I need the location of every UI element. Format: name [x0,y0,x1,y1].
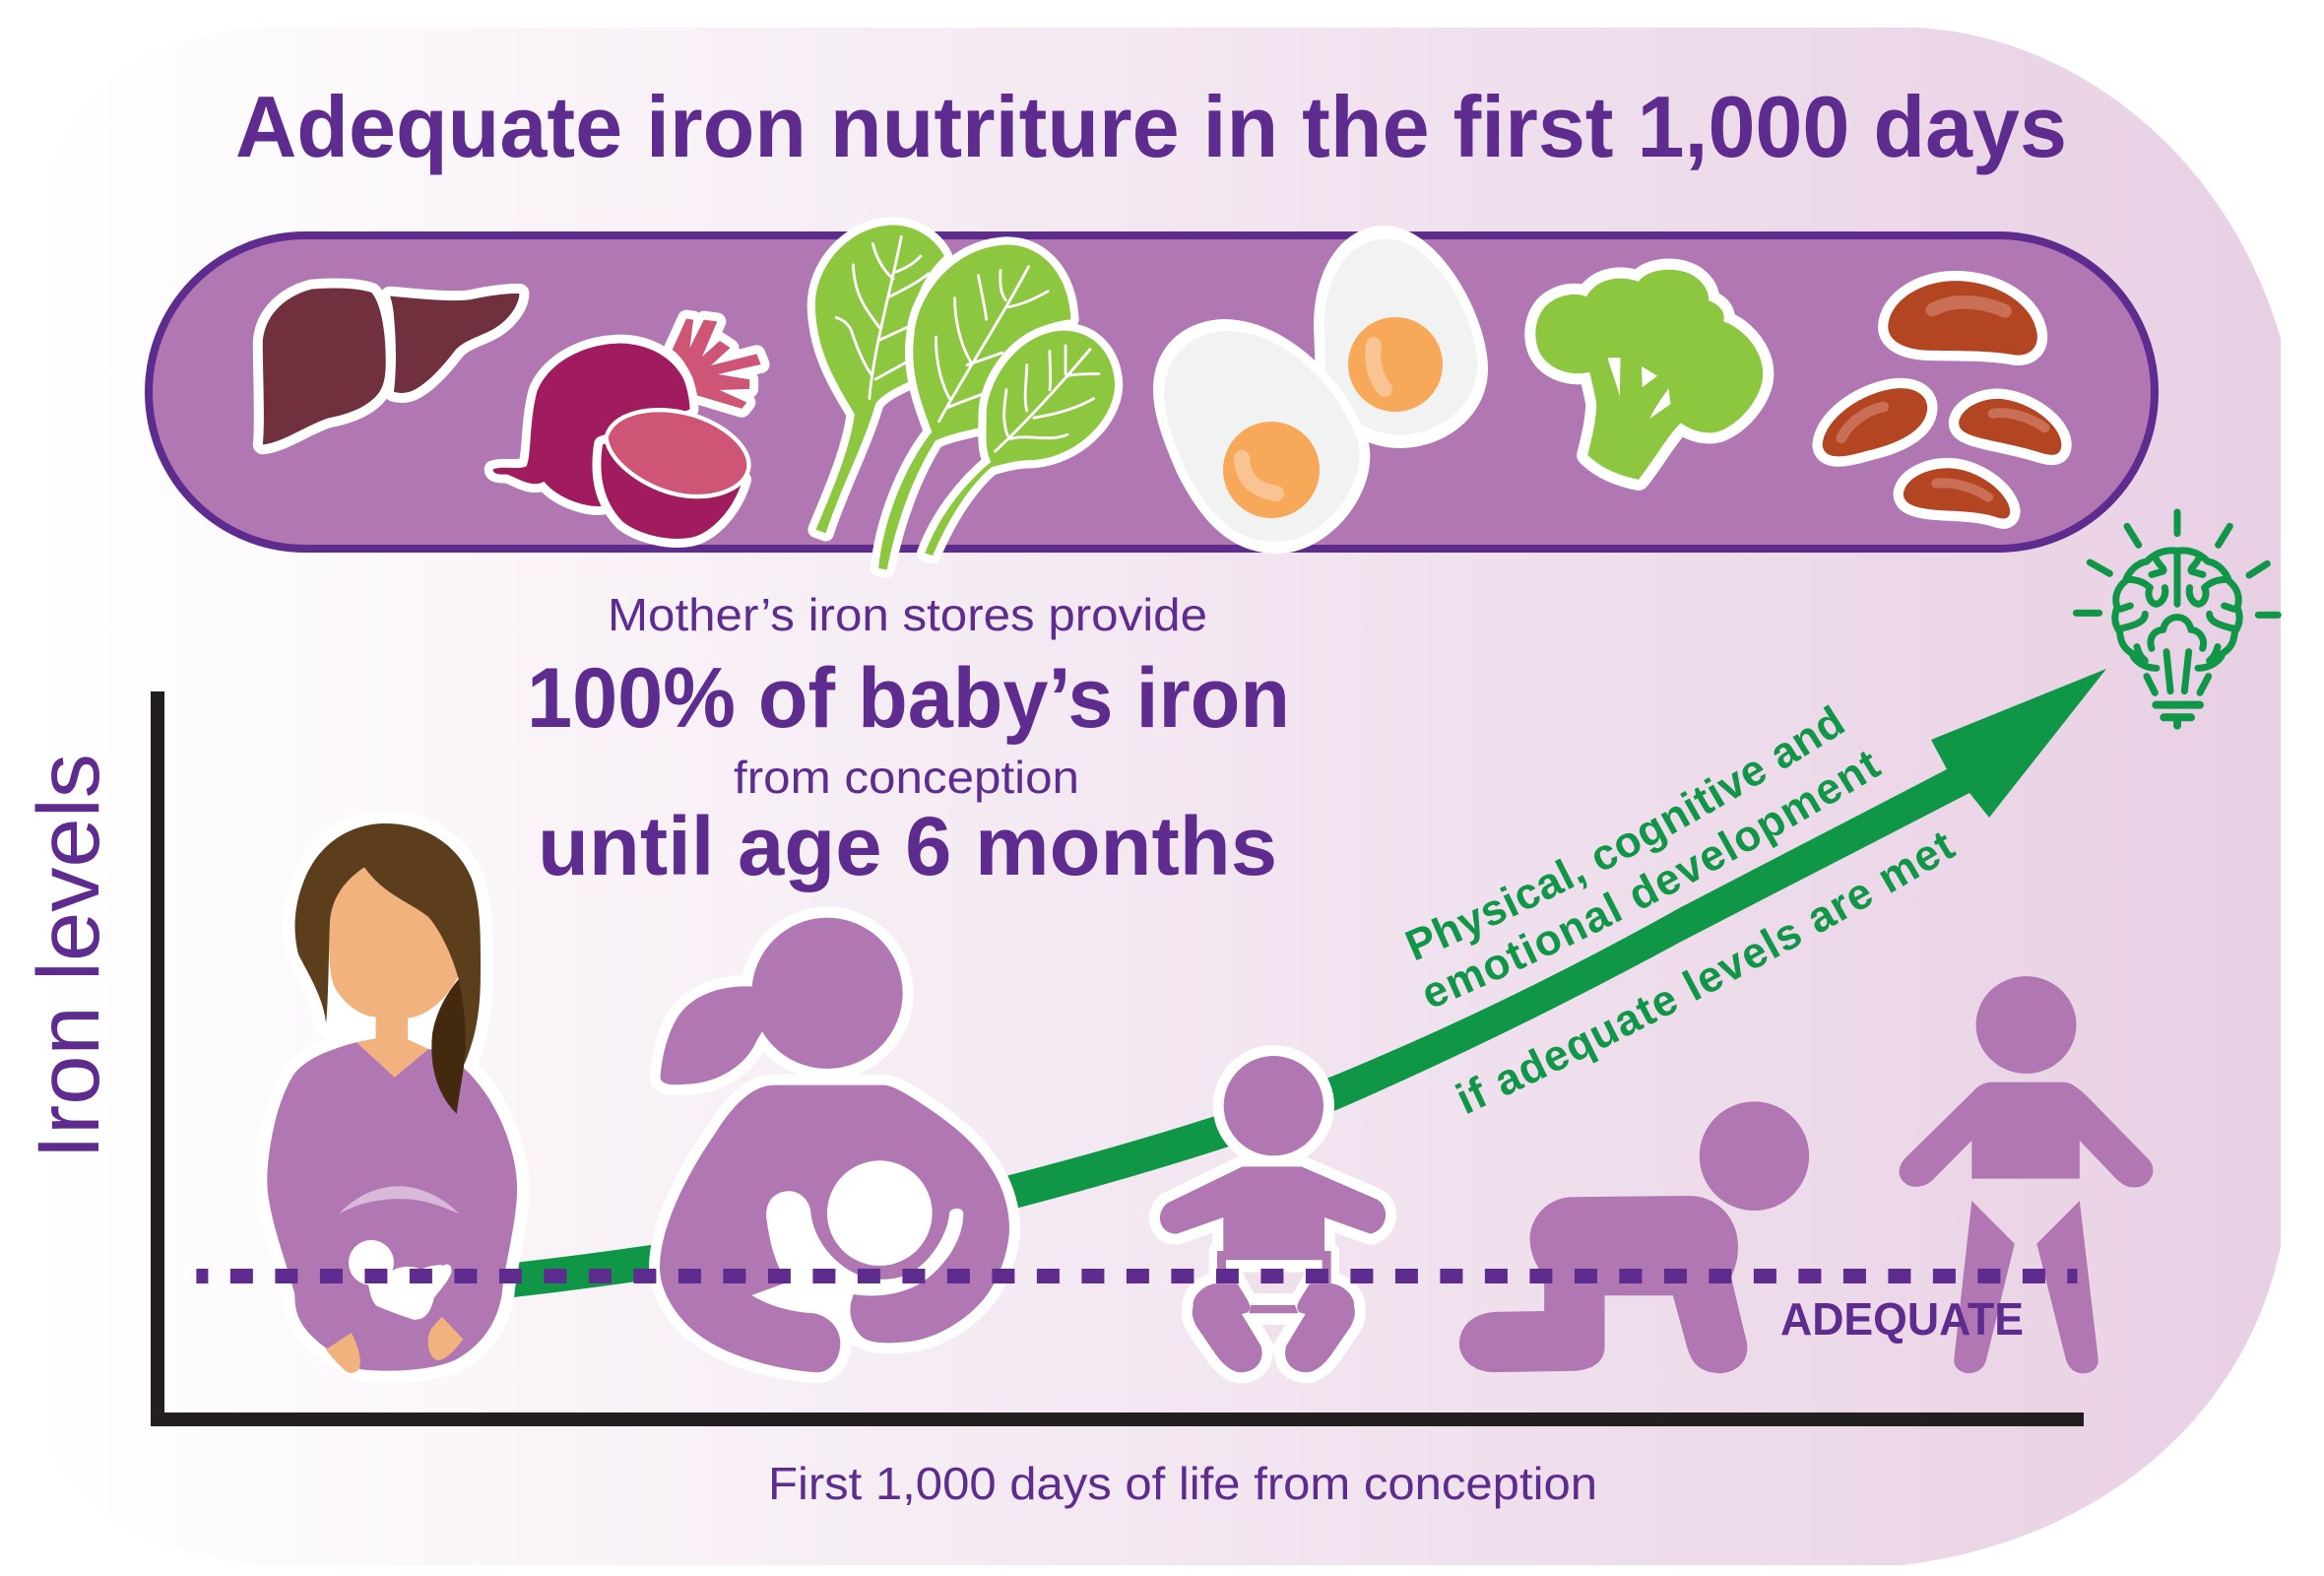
fetus [349,1240,452,1320]
bean 2 [1823,388,1927,456]
spinach leaf 2 [878,245,1070,569]
figure: pregnant mother [267,823,517,1373]
title: Adequate iron nutriture in the first 1,000 days [235,78,2067,175]
nursing baby head [827,1160,933,1266]
spinach leaf 3 [925,331,1115,556]
lower egg [1153,319,1370,554]
belly crescent [339,1186,460,1215]
icon: broccoli [1535,270,1763,480]
figure: sitting baby [1160,1056,1386,1372]
arrow text: if adequate levels are met: if adequate levels are met [1454,832,1957,1114]
icon: beetroot [493,319,761,539]
text: mother's iron stores: Mother’s iron stores provide [608,589,1207,640]
spinach leaf 1 [815,225,944,533]
icon: spinach leaves [815,225,1115,569]
adequate level dashed line [196,1269,2077,1283]
baby legs [1193,1283,1355,1372]
hair shadow lock [431,979,466,1114]
text: from conception: from conception [734,752,1079,803]
text: 100% of baby's iron: 100% of baby’s iron [527,651,1290,746]
hands [326,1317,463,1373]
panel: iron-rich foods pill [149,235,2155,549]
arrow text: physical, cognitive and: Physical, cognitive and [1404,704,1845,960]
bean 4 [1904,468,2010,518]
icon: kidney beans [1823,281,2061,518]
upper egg [1314,226,1488,448]
icon: brain light bulb [2076,512,2278,726]
arrow: development curve [514,669,2106,1297]
chart axes [151,691,2084,1426]
label: adequate: ADEQUATE [1780,1293,2024,1345]
text: until age 6 months: until age 6 months [538,800,1277,892]
icon: liver [263,288,519,444]
bean 1 [1888,281,2037,356]
hair [295,823,481,1064]
figure: crawling baby [1459,1101,1809,1373]
skin: face and neck [329,867,459,1078]
y axis label: Iron levels [19,754,117,1159]
x axis label: First 1,000 days of life from conception [768,1458,1597,1509]
figure: breastfeeding mother [660,918,1009,1372]
bean 3 [1959,399,2061,455]
figure: standing toddler [1900,976,2153,1373]
arrow text: emotional development: emotional development [1425,752,1883,1007]
icon: boiled eggs [1153,226,1488,554]
